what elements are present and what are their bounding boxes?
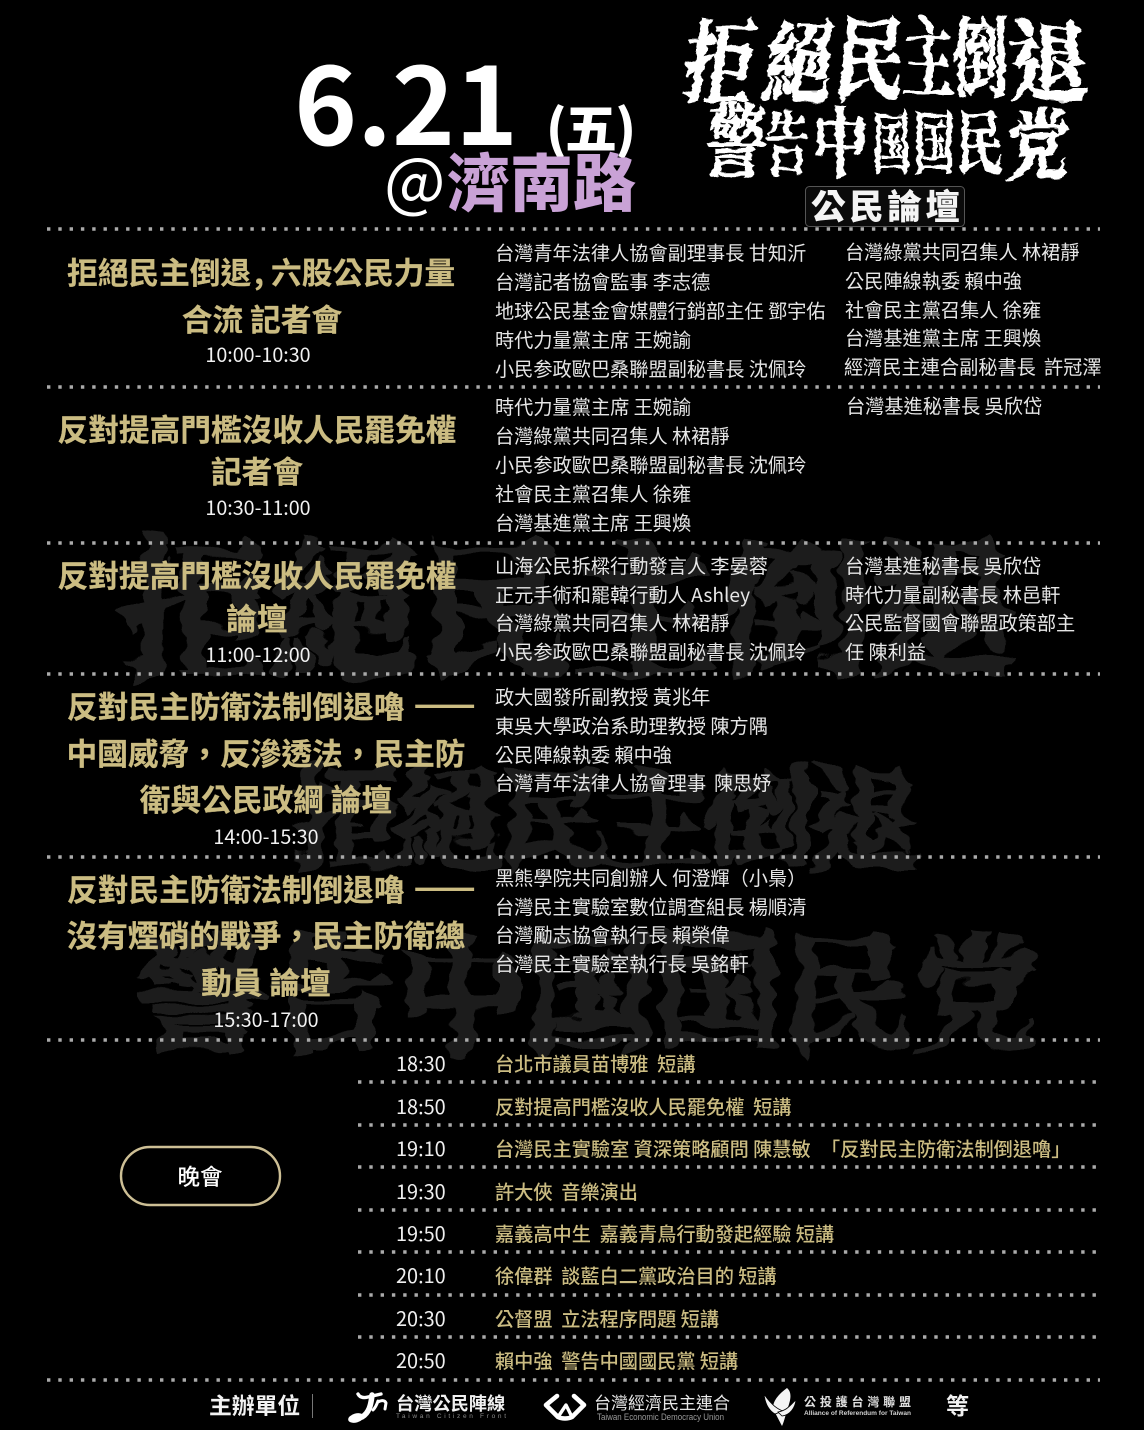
background watermark: campaign slogan: 拒絕民主倒退 <box>120 492 1020 708</box>
forum badge: 公民論壇 <box>811 179 960 229</box>
brush title: 党 <box>1001 85 1077 196</box>
dotted dividers <box>47 229 1100 1380</box>
session 2 speakers: 台灣綠黨共同召集人 林裙靜 <box>495 421 730 449</box>
brush title: 警 <box>700 79 772 195</box>
session 5 speakers: 台灣勵志協會執行長 賴榮偉 <box>495 920 730 948</box>
evening programme: 許大俠 音樂演出 <box>495 1177 638 1205</box>
session 4 title and time: 衛與公民政綱 論壇 <box>140 775 392 820</box>
session 1 title and time: 六股公民力量 <box>271 248 455 293</box>
session 1 speakers <box>495 237 1102 382</box>
evening programme: 徐偉群 談藍白二黨政治目的 短講 <box>495 1261 777 1289</box>
session 1 speakers: 經濟民主連合副秘書長 <box>844 352 1036 380</box>
background watermark: campaign slogan: 拒絕民主倒退 <box>290 734 920 892</box>
session 4 title and time <box>67 682 474 850</box>
session 1 speakers: 小民参政歐巴桑聯盟副秘書長 沈佩玲 <box>495 354 806 382</box>
session 1 speakers: 台灣基進黨主席 王興煥 <box>845 323 1041 351</box>
session 5 speakers: 台灣民主實驗室數位調查組長 楊順清 <box>495 892 806 920</box>
logo: Taiwan Economic Democracy Union <box>546 1389 730 1422</box>
session 2 title and time: 記者會 <box>211 447 303 492</box>
session 3 speakers: 台灣基進秘書長 吳欣岱 <box>845 551 1041 579</box>
evening session pill: 晚會 <box>177 1160 223 1192</box>
session 5 title and time <box>67 865 474 1033</box>
session 5 speakers: 台灣民主實驗室執行長 吳銘軒 <box>495 949 749 977</box>
session 1 speakers: 台灣記者協會監事 李志德 <box>495 267 710 295</box>
evening times: 18:50 <box>396 1091 446 1120</box>
session 4 speakers: 東吳大學政治系助理教授 陳方隅 <box>495 711 768 739</box>
brush title: 告 <box>765 88 810 189</box>
logo: Alliance of Referendum for Taiwan: Alliance of Referendum for Taiwan <box>804 1410 911 1417</box>
date heading <box>294 21 636 176</box>
logo: Taiwan Economic Democracy Union: 台灣經濟民主連合 <box>594 1389 730 1414</box>
session 2 speakers: 社會民主黨召集人 徐雍 <box>495 479 691 507</box>
session 3 speakers: 任 陳利益 <box>845 637 926 665</box>
session 4 speakers <box>495 682 772 796</box>
evening programme: 台北市議員苗博雅 短講 <box>495 1049 696 1077</box>
session 2 speakers: 小民参政歐巴桑聯盟副秘書長 沈佩玲 <box>495 450 806 478</box>
session 1 speakers: 許冠澤 <box>1044 352 1102 380</box>
session 2 speakers: 台灣基進秘書長 吳欣岱 <box>846 391 1042 419</box>
evening times: 19:50 <box>396 1218 446 1247</box>
evening session pill <box>121 1147 280 1205</box>
evening times: 18:30 <box>396 1048 446 1077</box>
session 1 title and time <box>67 248 455 368</box>
session 3 speakers: 公民監督國會聯盟政策部主 <box>845 608 1075 636</box>
session 3 title and time <box>58 551 456 668</box>
brush title <box>676 0 1089 196</box>
session 5 speakers <box>495 863 806 977</box>
evening programme: 嘉義高中生 嘉義青鳥行動發起經驗 短講 <box>495 1219 834 1247</box>
logo: Alliance of Referendum for Taiwan: 公投護台灣聯盟 <box>804 1393 911 1410</box>
session 1 speakers: 台灣青年法律人協會副理事長 甘知沂 <box>495 238 806 266</box>
session 1 title and time: , <box>254 248 264 293</box>
session 4 title and time: 14:00-15:30 <box>213 821 319 850</box>
session 4 title and time: 反對民主防衛法制倒退嚕 <box>67 682 405 727</box>
session 3 title and time: 反對提高門檻沒收人民罷免權 <box>58 551 456 596</box>
session 2 title and time: 10:30-11:00 <box>205 492 311 521</box>
brush title: 中 <box>813 83 868 194</box>
session 4 speakers: 政大國發所副教授 黃兆年 <box>495 682 710 710</box>
session 3 speakers: 台灣綠黨共同召集人 林裙靜 <box>495 608 730 636</box>
evening times: 20:10 <box>396 1260 446 1289</box>
location heading: 濟南路 <box>447 134 636 225</box>
session 4 speakers: 公民陣線執委 賴中強 <box>495 740 672 768</box>
brush title: 民 <box>957 89 1003 189</box>
organisers label: 主辦單位 <box>209 1388 300 1421</box>
session 2 title and time: 反對提高門檻沒收人民罷免權 <box>58 405 456 450</box>
session 2 speakers: 台灣基進黨主席 王興煥 <box>495 508 691 536</box>
background watermark: campaign slogan <box>120 492 1040 1077</box>
session 3 title and time: 11:00-12:00 <box>205 639 311 668</box>
session 5 title and time: 反對民主防衛法制倒退嚕 <box>67 865 405 910</box>
session 2 speakers <box>495 391 1042 536</box>
session 5 title and time: 沒有煙硝的戰爭，民主防衛總 <box>67 911 465 956</box>
session 4 speakers: 台灣青年法律人協會理事 <box>495 768 706 796</box>
evening times <box>396 1048 446 1374</box>
brush title: 国 <box>914 91 955 186</box>
session 5 speakers: 黑熊學院共同創辦人 何澄輝（小梟） <box>495 863 806 891</box>
evening times: 19:10 <box>396 1133 446 1162</box>
session 2 title and time <box>58 405 456 521</box>
evening times: 20:50 <box>396 1345 446 1374</box>
evening times: 20:30 <box>396 1303 446 1332</box>
session 3 speakers: 正元手術和罷韓行動人 Ashley <box>495 580 750 608</box>
session 3 speakers: 山海公民拆樑行動發言人 李晏蓉 <box>495 551 768 579</box>
session 1 speakers: 地球公民基金會媒體行銷部主任 鄧宇佑 <box>495 296 826 324</box>
session 5 title and time: —— <box>414 865 474 910</box>
session 1 speakers: 社會民主黨召集人 徐雍 <box>845 295 1041 323</box>
date heading: (五) <box>546 88 636 163</box>
organisers suffix: 等 <box>946 1387 969 1421</box>
session 1 title and time: 合流 記者會 <box>182 295 343 340</box>
session 3 speakers: 小民参政歐巴桑聯盟副秘書長 沈佩玲 <box>495 637 806 665</box>
session 5 title and time: 動員 論壇 <box>201 958 331 1003</box>
evening programme: 公督盟 立法程序問題 短講 <box>495 1304 719 1332</box>
evening programme: 「反對民主防衛法制倒退嚕」 <box>821 1134 1070 1162</box>
brush title: 国 <box>873 92 911 187</box>
evening programme: 台灣民主實驗室 資深策略顧問 陳慧敏 <box>495 1134 811 1162</box>
date heading: 6.21 <box>294 21 518 176</box>
background watermark: campaign slogan: 警告中国国民党 <box>140 893 1040 1077</box>
session 5 title and time: 15:30-17:00 <box>213 1004 319 1033</box>
logo: Alliance of Referendum for Taiwan <box>764 1388 911 1426</box>
session 2 speakers: 時代力量黨主席 王婉諭 <box>495 392 691 420</box>
session 1 speakers: 台灣綠黨共同召集人 林裙靜 <box>845 237 1080 265</box>
session 4 title and time: 中國威脅，反滲透法，民主防 <box>67 729 465 774</box>
logo: Taiwan Citizen Front: 台灣公民陣線 <box>396 1390 505 1416</box>
evening programme <box>495 1049 1070 1374</box>
logo: Taiwan Citizen Front <box>347 1390 506 1424</box>
session 3 speakers <box>495 551 1075 665</box>
logo: Taiwan Economic Democracy Union: Taiwan Economic Democracy Union <box>597 1412 724 1422</box>
evening times: 19:30 <box>396 1176 446 1205</box>
logo: Taiwan Citizen Front: Taiwan Citizen Front <box>396 1413 506 1420</box>
session 4 title and time: —— <box>414 682 474 727</box>
session 3 speakers: 時代力量副秘書長 林邑軒 <box>845 580 1060 608</box>
evening programme: 賴中強 警告中國國民黨 短講 <box>495 1346 738 1374</box>
location heading: @ <box>384 130 446 224</box>
session 1 title and time: 10:00-10:30 <box>205 339 311 368</box>
session 3 title and time: 論壇 <box>226 594 288 639</box>
session 1 speakers: 時代力量黨主席 王婉諭 <box>495 325 691 353</box>
session 1 speakers: 公民陣線執委 賴中強 <box>845 266 1022 294</box>
evening programme: 反對提高門檻沒收人民罷免權 短講 <box>495 1092 791 1120</box>
session 4 speakers: 陳思妤 <box>714 768 772 796</box>
session 1 title and time: 拒絕民主倒退 <box>67 248 251 293</box>
